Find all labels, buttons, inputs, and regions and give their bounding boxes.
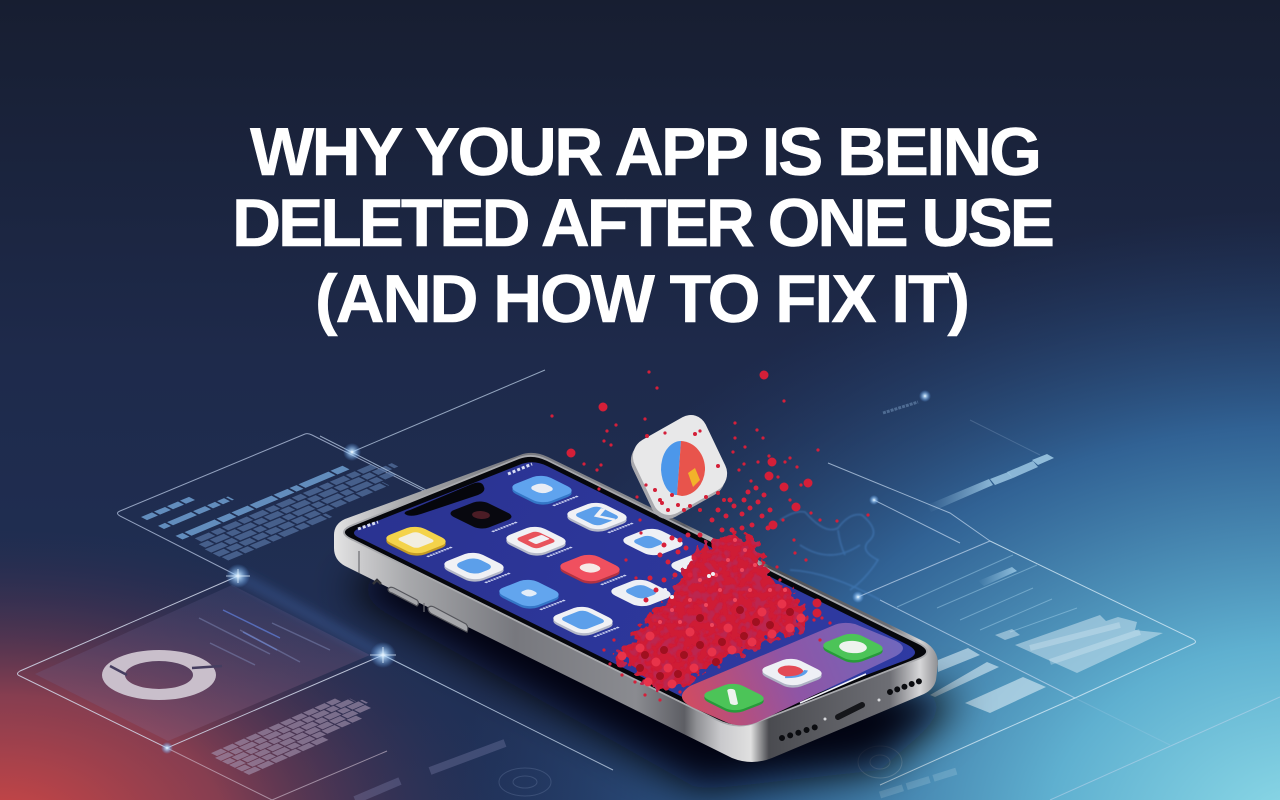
- panel: upper-left data card: [118, 434, 430, 576]
- glowing node: lower junction: [370, 642, 396, 668]
- white screen glints between particles: [665, 574, 713, 597]
- app icon: white large blue: [545, 604, 624, 640]
- thin text lines: [897, 555, 1077, 632]
- glowing node: card junction: [226, 564, 250, 588]
- app icon: white with blue left: [436, 550, 515, 586]
- screen: [354, 462, 915, 720]
- top row bars: [927, 454, 1054, 512]
- glowing node: right: [869, 495, 879, 505]
- donut chart: [102, 650, 222, 700]
- silent switch: [373, 580, 381, 584]
- lower bars: [930, 648, 1046, 713]
- app icon: blue top: [504, 474, 583, 509]
- app icon: white partly covered: [618, 526, 688, 558]
- small bar fading: [978, 567, 1017, 586]
- home bar: [800, 674, 866, 703]
- dock icon: white with heart: [754, 656, 830, 690]
- phone: [334, 453, 938, 762]
- faint radar circle: [499, 768, 551, 796]
- glowing node: upper left: [343, 443, 361, 461]
- notch: [405, 483, 484, 516]
- mic dots: [825, 700, 879, 719]
- faint map lines: [780, 512, 880, 600]
- app icon: blue drop: [491, 578, 570, 613]
- bar grid: [211, 694, 386, 773]
- glowing node: right lower: [852, 591, 864, 603]
- app icon: white with blue envelope: [559, 500, 638, 536]
- app icon: black: [446, 500, 522, 534]
- floating app icon: [625, 408, 733, 526]
- phone body: [334, 453, 938, 762]
- loose small particles: [552, 372, 868, 700]
- app icon: yellow: [378, 524, 457, 560]
- fine mid granules: [660, 540, 785, 625]
- glowing node: bottom: [161, 742, 173, 754]
- glowing node: top right: [919, 390, 931, 402]
- red particle mass: [552, 372, 868, 700]
- connector lines: [320, 370, 1280, 800]
- upper column granules: [646, 488, 770, 600]
- faint lower right bars: [880, 770, 960, 795]
- app icon: white far right: [666, 552, 736, 582]
- speaker holes left: [782, 727, 816, 738]
- title: [232, 114, 1055, 337]
- faint radar rings: [858, 746, 902, 778]
- title: WHY YOUR APP IS BEING: [250, 114, 1042, 190]
- bright chunky granules: [622, 604, 801, 684]
- app icon: red: [552, 552, 631, 588]
- dock icon: green phone: [696, 682, 772, 715]
- app icon: white with red: [498, 524, 577, 560]
- charging port: [838, 705, 862, 717]
- antenna seams: [359, 551, 424, 612]
- volume buttons: [388, 587, 468, 632]
- pie chart on floating icon: [661, 441, 705, 496]
- dock icon: green top: [815, 632, 891, 665]
- panel: lower-left donut card: [18, 576, 383, 748]
- red specks on floating icon: [647, 434, 724, 510]
- dense pile: [612, 535, 806, 688]
- histogram cluster: [995, 615, 1163, 673]
- dark chunky granules: [640, 610, 790, 676]
- app icon: white covered: [606, 578, 676, 608]
- text lines in donut card: [199, 610, 330, 665]
- title: DELETED AFTER ONE USE: [232, 185, 1055, 261]
- title: (AND HOW TO FIX IT): [315, 261, 970, 337]
- phone bezel: [344, 456, 927, 726]
- dock: [682, 623, 903, 725]
- status bar marks: [358, 464, 532, 529]
- speaker holes right: [890, 681, 920, 692]
- bars in upper-left card: [143, 436, 419, 560]
- large particles: [571, 375, 817, 613]
- panel: bottom-left bar grid card: [167, 694, 551, 800]
- faint bars at bottom: [355, 743, 505, 800]
- panel: right chart card: [780, 402, 1196, 795]
- phone shadow: [345, 540, 960, 790]
